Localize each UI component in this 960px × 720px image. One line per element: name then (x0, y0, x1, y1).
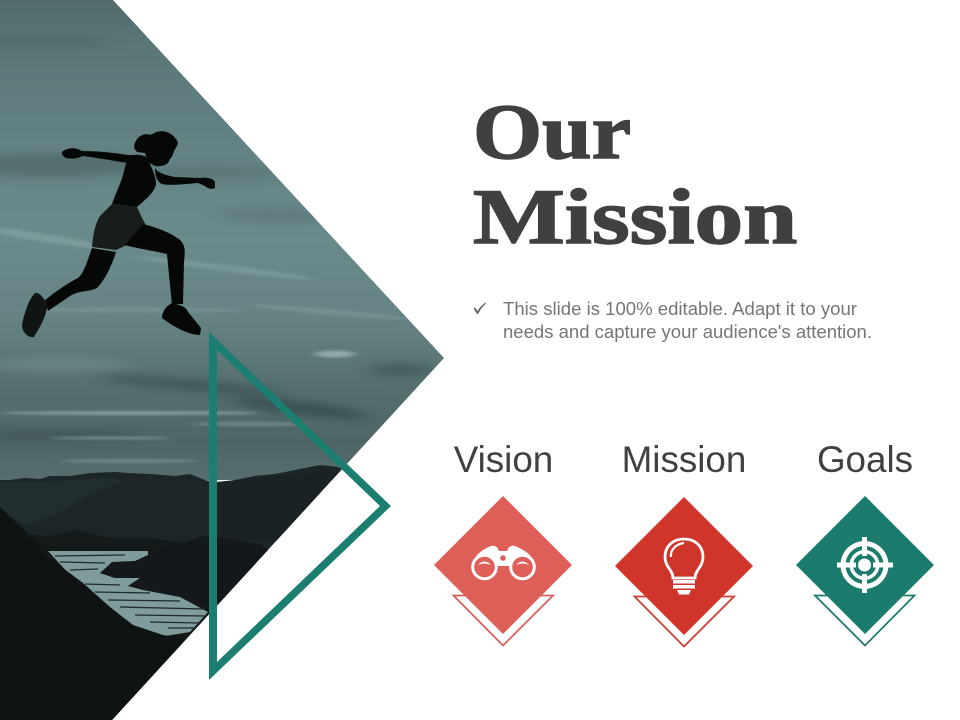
rear leg (45, 248, 116, 311)
clouds (0, 152, 434, 464)
diamond (434, 496, 572, 634)
front arm (155, 168, 215, 189)
front shoe (162, 303, 201, 335)
title (473, 89, 797, 261)
icon: light bulb (665, 539, 703, 594)
icon: check mark (474, 302, 486, 314)
foreground rock (0, 507, 190, 720)
diamond (615, 497, 753, 635)
bullet text: needs and capture your audience's attention. (503, 321, 872, 342)
torso (112, 155, 156, 207)
column headings: Vision (454, 439, 553, 480)
shoreline band (30, 530, 268, 720)
river (48, 551, 208, 636)
sky (0, 0, 450, 480)
front leg (125, 224, 185, 304)
far ridge lighter (0, 478, 125, 525)
bullet text (474, 298, 872, 342)
bullet text: This slide is 100% editable. Adapt it to your (503, 298, 857, 319)
icon: binoculars (473, 546, 534, 579)
mission card (615, 497, 753, 646)
title: Mission (473, 174, 797, 261)
head and ponytail (134, 131, 178, 166)
river ripples (55, 555, 205, 628)
photo: athlete leaping over mountain landscape (0, 0, 450, 720)
distant hills (0, 465, 360, 720)
chevron (634, 596, 734, 646)
diamond (796, 496, 934, 634)
column headings: Goals (817, 439, 913, 480)
goals card (796, 496, 934, 646)
chevron (815, 596, 914, 646)
icon: runner silhouette (22, 131, 215, 337)
back arm (62, 148, 146, 165)
column headings (454, 439, 913, 480)
shorts (92, 204, 147, 250)
island rocks (100, 536, 268, 606)
rear shoe (22, 293, 47, 337)
title: Our (473, 89, 631, 176)
vision card (434, 496, 572, 646)
outlined teal triangle (209, 332, 391, 680)
chevron (454, 596, 553, 646)
column headings: Mission (622, 439, 746, 480)
icon: target (837, 537, 893, 593)
